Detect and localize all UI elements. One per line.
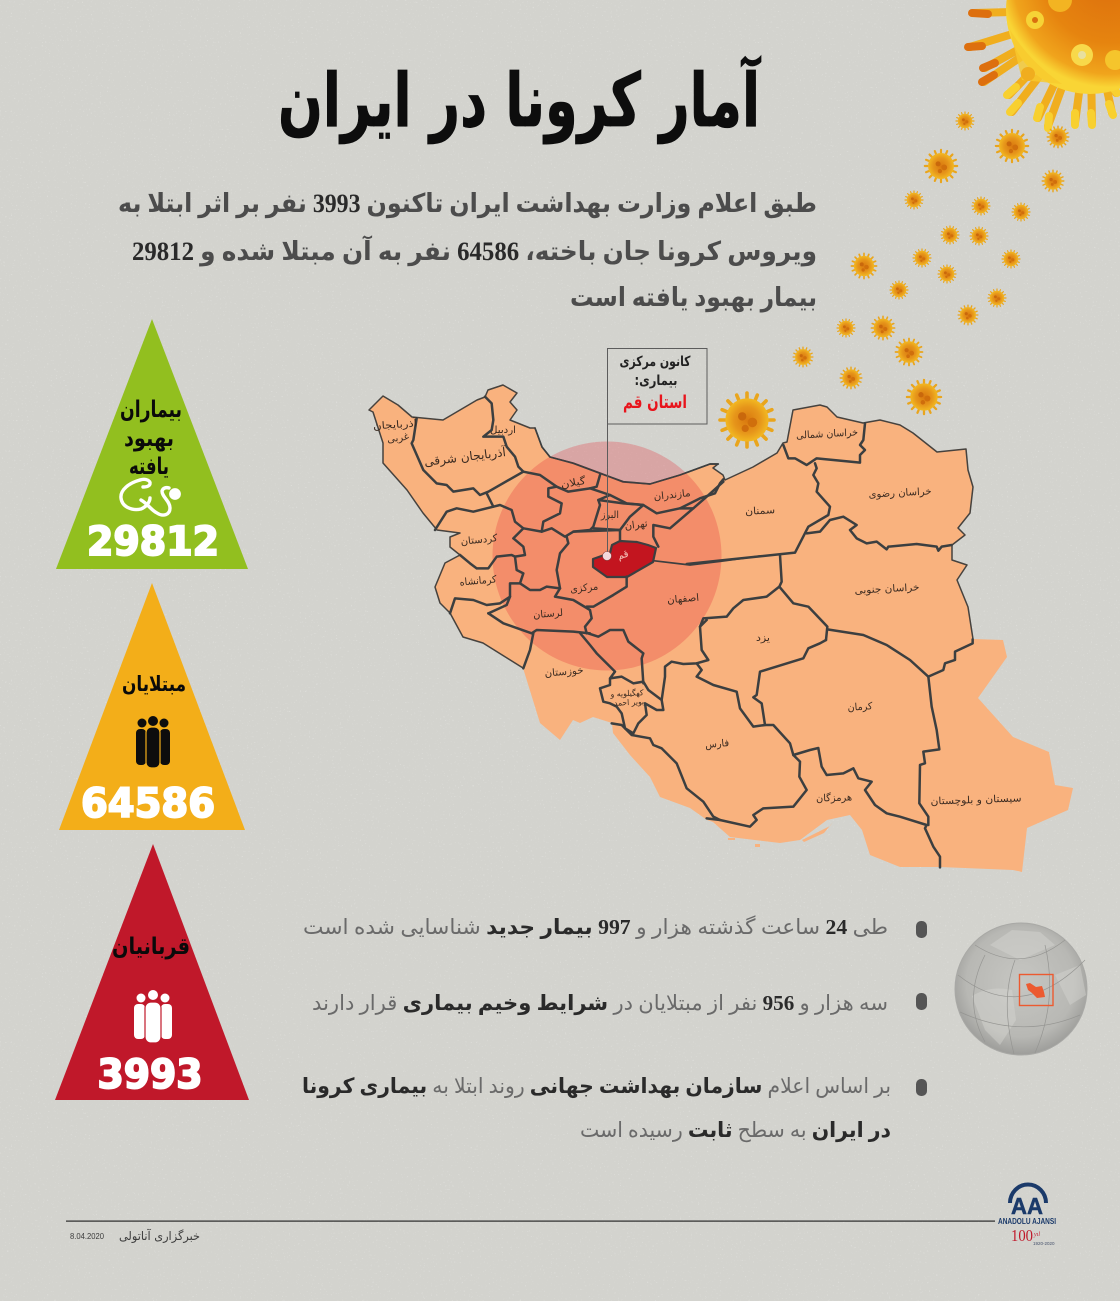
- large virus, top right: [968, 0, 1120, 128]
- intro paragraph: بیمار بهبود یافته است: [570, 283, 817, 313]
- panel: infected triangle: [59, 583, 245, 830]
- deaths label: قربانیان: [112, 934, 190, 960]
- province labels: مرکزی: [570, 582, 599, 595]
- footer source and date: خبرگزاری آناتولی: [119, 1228, 200, 1244]
- panel: deaths triangle: [55, 844, 249, 1100]
- infected label: مبتلایان: [122, 672, 186, 696]
- province labels: خراسان رضوی: [868, 486, 932, 501]
- outbreak zone circle: [492, 442, 722, 670]
- callout: epicentre: کانون مرکزی: [620, 354, 691, 370]
- bullet 3: [302, 1074, 927, 1142]
- province borders west: [412, 397, 760, 668]
- province labels: کرمانشاه: [459, 574, 497, 589]
- province labels: آذربایجان: [373, 416, 419, 433]
- province labels: غربی: [386, 432, 410, 445]
- logo: Anadolu Ajansi: [998, 1185, 1056, 1246]
- province labels: آذربایجان شرقی: [423, 444, 507, 470]
- Qom province: [593, 541, 656, 577]
- logo: Anadolu Ajansi: AA: [1011, 1193, 1043, 1219]
- callout: epicentre: بیماری:: [634, 373, 678, 389]
- map of Iran: [369, 385, 1073, 872]
- islands: [728, 822, 833, 847]
- province labels: اردبیل: [490, 425, 516, 436]
- province labels: خراسان جنوبی: [854, 582, 920, 597]
- recovered label: [120, 397, 182, 480]
- province borders east: [680, 423, 973, 867]
- small virus particles: [720, 112, 1069, 447]
- province labels: لرستان: [533, 608, 564, 621]
- logo: Anadolu Ajansi: yıl: [1033, 1232, 1040, 1238]
- bullet 3: بر اساس اعلام سازمان بهداشت جهانی روند ابتلا به بیماری کرونا: [302, 1074, 891, 1098]
- province labels: کردستان: [460, 533, 498, 548]
- recovered label: بهبود: [124, 426, 174, 452]
- province labels: گیلان: [560, 475, 587, 491]
- bullet 2: سه هزار و 956 نفر از مبتلایان در شرایط وخیم بیماری قرار دارند: [312, 991, 888, 1015]
- province labels: [373, 416, 1022, 808]
- province labels: کهگیلویه و: [609, 687, 644, 699]
- logo: Anadolu Ajansi: 1920-2020: [1033, 1241, 1055, 1246]
- province labels: خوزستان: [544, 665, 584, 680]
- province labels: مازندران: [653, 488, 691, 503]
- province labels: اصفهان: [667, 593, 700, 606]
- logo: Anadolu Ajansi: ANADOLU AJANSI: [998, 1216, 1056, 1226]
- recovered number: 29812: [87, 519, 219, 565]
- province labels: خراسان شمالی: [796, 427, 858, 442]
- infected number: 64586: [81, 781, 215, 827]
- icon: stethoscope: [121, 479, 179, 515]
- province labels: تهران: [624, 518, 649, 533]
- province labels: فارس: [705, 738, 730, 751]
- callout: epicentre: [602, 348, 707, 560]
- province labels: کرمان: [847, 701, 873, 714]
- globe locator: [955, 923, 1087, 1055]
- province borders central south: [580, 620, 826, 827]
- panel: recovered triangle: [56, 319, 248, 569]
- footer rule: [66, 1220, 995, 1222]
- province labels: سمنان: [745, 505, 775, 518]
- province labels: هرمزگان: [816, 791, 852, 805]
- intro paragraph: [118, 189, 817, 313]
- callout: epicentre: استان قم: [623, 392, 687, 413]
- bullet 1: طی 24 ساعت گذشته هزار و 997 بیمار جدید شناسایی شده است: [303, 915, 888, 939]
- recovered label: یافته: [129, 454, 169, 480]
- province labels: بویر احمد: [614, 697, 644, 708]
- bullet 3: در ایران به سطح ثابت رسیده است: [580, 1118, 891, 1142]
- icon: people: [136, 716, 170, 768]
- recovered label: بیماران: [120, 397, 182, 423]
- intro paragraph: ویروس کرونا جان باخته، 64586 نفر به آن مبتلا شده و 29812: [132, 235, 817, 267]
- bullet list: [302, 915, 927, 1142]
- title: آمار کرونا در ایران: [278, 55, 761, 145]
- province labels: البرز: [600, 510, 619, 521]
- land mass: [369, 385, 1073, 872]
- intro paragraph: طبق اعلام وزارت بهداشت ایران تاکنون 3993 نفر بر اثر ابتلا به: [118, 189, 817, 219]
- icon: people: [134, 990, 172, 1043]
- province labels: یزد: [756, 633, 770, 644]
- province labels: سیستان و بلوچستان: [930, 793, 1022, 808]
- logo: Anadolu Ajansi: 100: [1011, 1226, 1033, 1245]
- deaths number: 3993: [98, 1052, 202, 1098]
- footer source and date: [70, 1228, 200, 1244]
- province labels: قم: [616, 548, 630, 562]
- outer border: [369, 385, 973, 668]
- footer source and date: 8.04.2020: [70, 1231, 104, 1241]
